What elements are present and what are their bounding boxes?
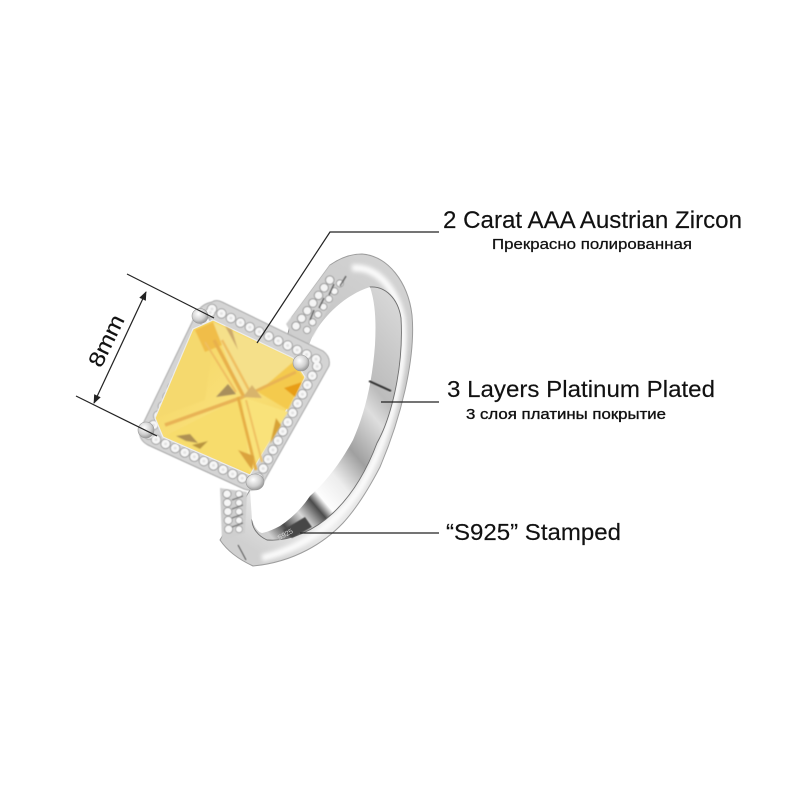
lower shoulder pave stones [220, 488, 247, 541]
ring opening [250, 287, 375, 533]
ring illustration [138, 254, 413, 566]
dimension: 8mm: 8mm [83, 311, 130, 371]
dimension: 8mm [76, 274, 214, 436]
callout: zircon: 2 Carat AAA Austrian Zircon [443, 207, 742, 234]
ring band outer surface [220, 254, 413, 566]
prongs [138, 308, 309, 490]
ring band inner surface [252, 287, 401, 540]
band seam line [238, 545, 246, 560]
band highlight [262, 268, 403, 558]
S925 stamp [277, 517, 312, 542]
S925 stamp: S925 [277, 528, 295, 542]
callout: zircon: Прекрасно полированная [492, 237, 692, 253]
dark slot on band [369, 381, 391, 391]
callout: platinum plating: 3 слоя платины покрытие [466, 407, 666, 423]
yellow gemstone [155, 320, 305, 475]
callout: platinum plating [381, 376, 715, 423]
halo setting [140, 300, 329, 490]
callout: S925 stamp: “S925” Stamped [446, 519, 621, 545]
callout: platinum plating: 3 Layers Platinum Plated [447, 376, 715, 402]
callout: zircon [257, 207, 742, 343]
upper shoulder pave stones [286, 265, 348, 348]
